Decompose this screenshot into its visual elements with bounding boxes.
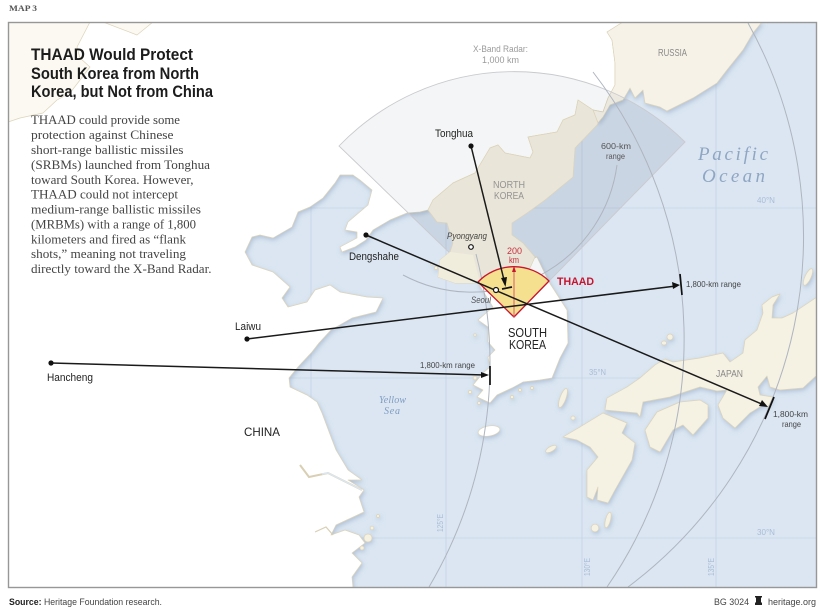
label: map number: MAP 3 <box>9 3 37 13</box>
body text: protection against Chinese <box>31 128 174 142</box>
body text: short-range ballistic missiles <box>31 143 184 157</box>
label: Seoul: Seoul <box>471 295 492 306</box>
body text <box>31 113 212 276</box>
land: North Korea <box>428 100 598 283</box>
label: BG number: BG 3024 <box>714 597 749 608</box>
label: Pacific Ocean <box>697 144 769 187</box>
THAAD 200 km sector <box>478 266 549 317</box>
Hancheng missile line <box>48 360 490 385</box>
label: South Korea: SOUTH <box>508 326 547 340</box>
graticule lines <box>290 84 816 587</box>
land: South Korea <box>473 257 568 403</box>
body text: THAAD could not intercept <box>31 188 179 202</box>
river: Yangtze <box>300 465 362 535</box>
label: 600-km range <box>601 141 631 161</box>
label: X-Band Radar range <box>473 44 528 66</box>
title: THAAD Would Protect <box>31 45 193 64</box>
body text: toward South Korea. However, <box>31 173 194 187</box>
title: South Korea from North <box>31 64 199 83</box>
Dengshahe missile line <box>363 232 774 419</box>
label: 125E: 125°E <box>436 514 445 532</box>
Laiwu missile line <box>244 274 682 342</box>
land: China <box>8 22 623 588</box>
body text: (MRBMs) with a range of 1,800 <box>31 218 196 232</box>
label: North Korea: KOREA <box>494 190 524 202</box>
land: pale region top left <box>8 22 153 122</box>
body text: kilometers and fired as “flank <box>31 232 187 246</box>
icon: Liberty Bell <box>755 596 762 605</box>
label: Russia: RUSSIA <box>658 48 687 59</box>
label: 600-km range: 600-km <box>601 141 631 151</box>
label: Laiwu: Laiwu <box>235 321 261 333</box>
X-band radar fan <box>338 71 686 281</box>
land: small islands <box>360 263 815 550</box>
land: Hwanghae region <box>438 252 480 283</box>
title: Korea, but Not from China <box>31 82 213 101</box>
land: Russia <box>593 22 762 123</box>
label: Yellow Sea <box>379 395 406 417</box>
marker: Seoul <box>494 288 498 292</box>
label: X-Band Radar range: X-Band Radar: <box>473 44 528 55</box>
label: North Korea <box>493 179 525 202</box>
label: 600-km range: range <box>606 151 625 161</box>
label: South Korea <box>508 326 547 352</box>
label: 35N: 35°N <box>589 368 606 377</box>
label: X-Band Radar range: 1,000 km <box>482 55 519 66</box>
source note: Source: Heritage Foundation research. <box>9 597 162 608</box>
label: Japan: JAPAN <box>716 369 743 380</box>
label: Yellow Sea: Sea <box>384 406 400 417</box>
marker: Pyongyang <box>469 245 473 249</box>
label: Pacific Ocean: Ocean <box>702 166 765 187</box>
range arcs <box>403 23 803 587</box>
land: Japan Shikoku <box>645 400 708 452</box>
label: Dengshahe range: 1,800-km <box>773 409 808 419</box>
label: THAAD: THAAD <box>557 276 594 288</box>
label: North Korea: NORTH <box>493 179 525 191</box>
label: 135E: 135°E <box>707 558 716 576</box>
label: 40N: 40°N <box>757 196 775 205</box>
body text: directly toward the X-Band Radar. <box>31 262 212 276</box>
label: South Korea: KOREA <box>509 338 547 352</box>
label: China: CHINA <box>244 425 280 439</box>
body text: medium-range ballistic missiles <box>31 202 201 216</box>
label: website: heritage.org <box>768 597 816 608</box>
Tonghua missile line <box>468 143 512 289</box>
X-band fan tint over sea <box>339 72 685 316</box>
title <box>31 45 213 101</box>
label: 200 km: 200 <box>507 246 522 257</box>
label: Dengshahe range <box>773 409 808 429</box>
label: Dengshahe range: range <box>782 419 801 429</box>
label: Laiwu range: 1,800-km range <box>686 279 741 289</box>
label: Pyongyang: Pyongyang <box>447 231 488 242</box>
label: Tonghua: Tonghua <box>435 128 474 140</box>
label: 200 km: km <box>509 255 519 265</box>
label: 30N: 30°N <box>757 528 775 537</box>
label: 200 km <box>507 246 522 265</box>
label: Hancheng range: 1,800-km range <box>420 360 475 370</box>
label: Dengshahe: Dengshahe <box>349 251 399 263</box>
label: 130E: 130°E <box>583 558 592 576</box>
body text: THAAD could provide some <box>31 113 180 127</box>
land: Japan Kyushu <box>563 413 635 503</box>
label: Hancheng: Hancheng <box>47 372 93 384</box>
label: Pacific Ocean: Pacific <box>697 144 769 165</box>
body text: shots,” meaning not traveling <box>31 247 187 261</box>
land: Japan Honshu <box>605 294 817 428</box>
body text: (SRBMs) launched from Tonghua <box>31 158 210 172</box>
label: Yellow Sea: Yellow <box>379 395 406 406</box>
